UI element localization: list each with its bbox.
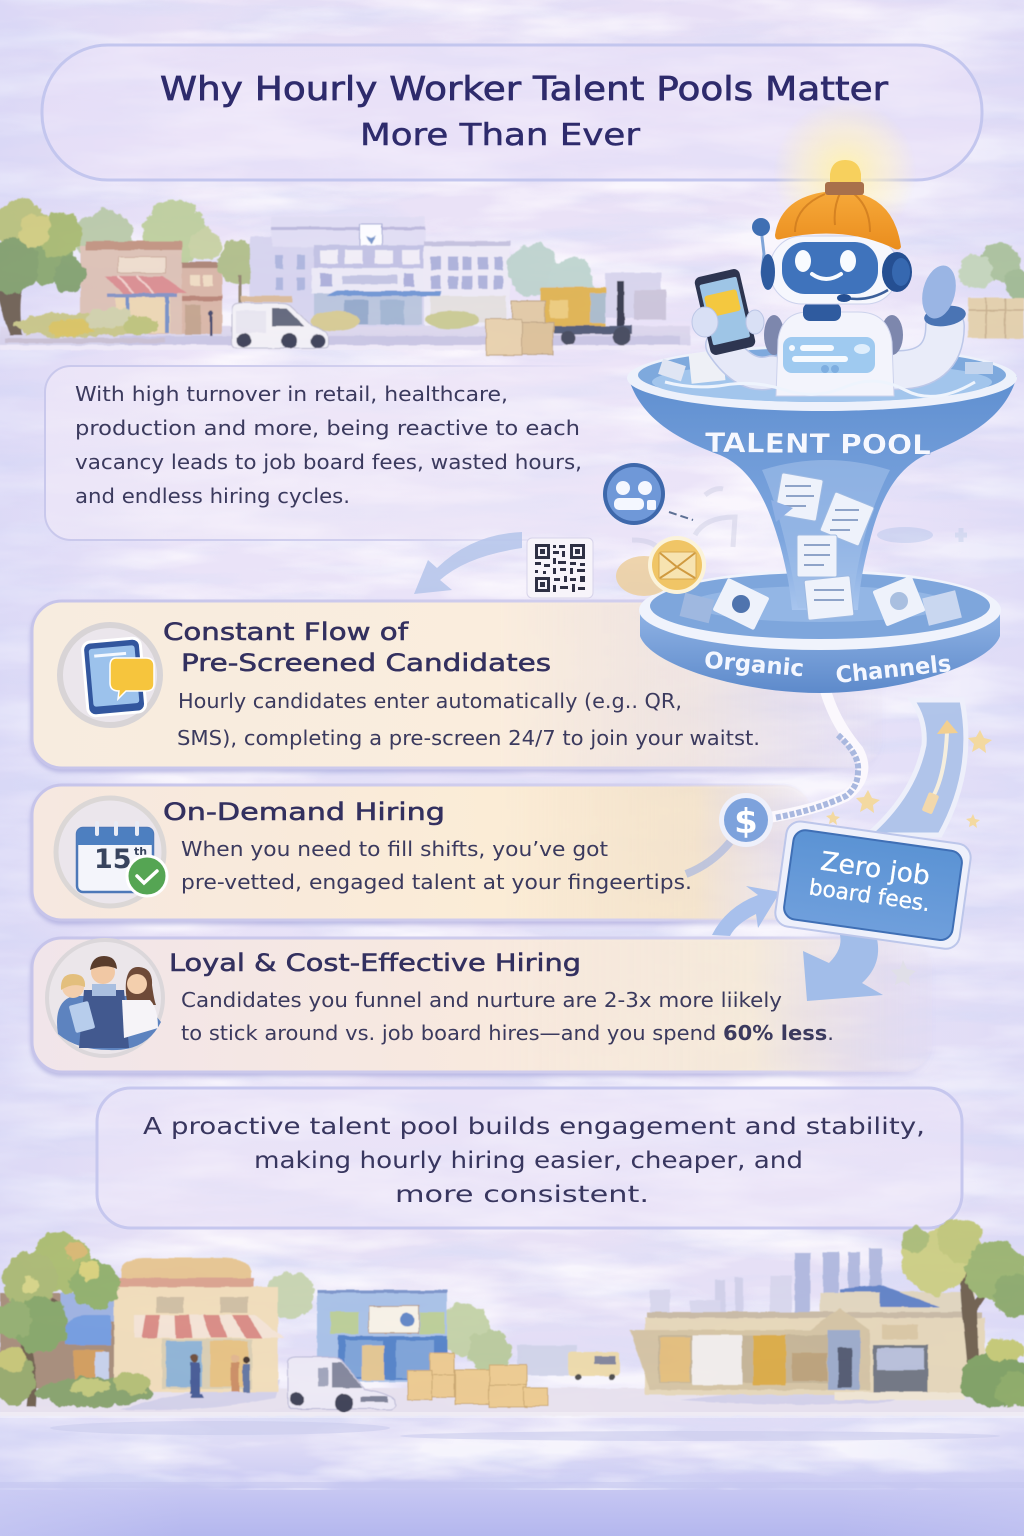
arrow: downward big blue arrow xyxy=(803,935,883,1001)
robot neck xyxy=(803,303,841,321)
robot chest panel xyxy=(783,337,875,373)
card heading: On-Demand Hiring xyxy=(163,798,445,826)
organic label: Organic xyxy=(703,648,805,682)
closing text xyxy=(143,1114,925,1208)
documents falling in funnel xyxy=(771,473,874,620)
intro text panel xyxy=(45,366,695,540)
faded icons behind funnel xyxy=(632,489,967,560)
card body: pre-vetted, engaged talent at your fingeertips. xyxy=(181,870,692,894)
intro paragraph: production and more, being reactive to each xyxy=(75,416,580,440)
robot right hand xyxy=(917,262,967,329)
icon: envelope circle xyxy=(648,536,706,594)
robot antenna xyxy=(752,218,770,284)
intro paragraph: and endless hiring cycles. xyxy=(75,484,350,508)
arrow: curved pale arrow pointing left from QR xyxy=(414,532,522,594)
white van xyxy=(288,1357,395,1412)
icon: people circle xyxy=(603,463,665,525)
icon: phone with chat bubble xyxy=(60,625,160,725)
top street scene illustration xyxy=(0,199,690,355)
funnel: talent pool xyxy=(627,100,1017,693)
path: arc from dollar down across card two xyxy=(686,842,730,874)
robot shoulders xyxy=(764,315,903,355)
robot headset xyxy=(761,252,912,302)
title panel xyxy=(42,45,982,180)
robot hard hat xyxy=(775,160,901,250)
closing text: making hourly hiring easier, cheaper, and xyxy=(254,1148,803,1174)
robot xyxy=(665,160,975,396)
card body xyxy=(177,689,760,750)
card: constant flow xyxy=(32,601,882,768)
icon: QR code xyxy=(527,538,593,598)
intro paragraph xyxy=(75,382,582,508)
card body xyxy=(181,988,834,1045)
channels label: Channels xyxy=(834,651,952,689)
blue shop xyxy=(317,1290,447,1382)
callout: zero job board fees: board fees. xyxy=(807,875,932,917)
title second line: More Than Ever xyxy=(360,118,641,153)
robot left arm xyxy=(722,345,772,373)
robot water line xyxy=(665,381,975,396)
lower dish xyxy=(639,570,1001,693)
talent pool label: TALENT POOL xyxy=(705,428,931,461)
closing statement panel xyxy=(97,1088,962,1228)
robot visor xyxy=(782,242,878,294)
robot head xyxy=(770,236,898,304)
icon: delivery truck and boxes xyxy=(486,281,632,355)
right side background scene fragment xyxy=(958,242,1024,338)
card body: Candidates you funnel and nurture are 2-3x more liikely xyxy=(181,988,782,1012)
icon: dollar coin xyxy=(719,793,773,847)
icon: three workers xyxy=(47,940,163,1056)
left tree xyxy=(0,1232,119,1407)
icon: white van xyxy=(232,296,328,349)
closing text: A proactive talent pool builds engagement and stability, xyxy=(143,1114,925,1140)
arrow: large upward curved band xyxy=(868,700,966,835)
bowl rim xyxy=(627,345,1017,411)
cards in the dish xyxy=(680,576,962,630)
arrow: pointing right to badge xyxy=(712,886,780,936)
main shop with striped awning xyxy=(114,1258,284,1392)
left small shop xyxy=(0,1292,114,1388)
card body: When you need to fill shifts, you’ve got xyxy=(181,837,608,861)
left bushes xyxy=(0,1348,153,1407)
path: trail from funnel to dollar xyxy=(766,660,863,818)
icon: calendar with check: 15 xyxy=(94,844,132,875)
card body xyxy=(181,837,692,894)
icon: coins xyxy=(616,556,672,596)
right tree and bush xyxy=(902,1218,1024,1408)
stacked boxes xyxy=(408,1353,548,1407)
icon: calendar with check: th xyxy=(134,845,147,858)
card heading: Loyal & Cost-Effective Hiring xyxy=(169,949,581,977)
title text: Why Hourly Worker Talent Pools Matter xyxy=(160,69,888,108)
icon: dollar coin: $ xyxy=(734,802,758,842)
floating documents in bowl xyxy=(658,350,993,384)
card heading: Constant Flow of xyxy=(163,618,409,646)
callout: zero job board fees: Zero job xyxy=(819,847,932,892)
callout: zero job board fees xyxy=(774,820,972,951)
card: loyal and cost-effective xyxy=(32,938,932,1072)
dashed arrow from people circle xyxy=(669,512,693,520)
card body: Hourly candidates enter automatically (e.g.. QR, xyxy=(178,689,682,713)
skyline xyxy=(650,1248,882,1320)
robot right arm xyxy=(892,326,945,370)
robot phone hand xyxy=(692,268,764,356)
robot torso xyxy=(776,312,894,396)
card body: SMS), completing a pre-screen 24/7 to join your waitst. xyxy=(177,726,760,750)
closing text: more consistent. xyxy=(395,1182,649,1208)
bottom street scene illustration xyxy=(0,1218,1024,1416)
small van in distance xyxy=(517,1345,620,1380)
people at shop xyxy=(190,1354,250,1398)
stars xyxy=(826,730,992,986)
warehouse xyxy=(630,1285,985,1400)
card heading: Pre-Screened Candidates xyxy=(181,649,551,677)
icon: calendar with check xyxy=(56,798,167,906)
ground wash at bottom xyxy=(0,1412,1024,1488)
intro paragraph: With high turnover in retail, healthcare, xyxy=(75,382,508,406)
card: on-demand hiring xyxy=(32,785,812,920)
funnel bowl xyxy=(628,376,1017,610)
intro paragraph: vacancy leads to job board fees, wasted hours, xyxy=(75,450,582,474)
card body: to stick around vs. job board hires—and you spend 60% less . xyxy=(181,1021,834,1045)
card heading xyxy=(163,618,551,677)
